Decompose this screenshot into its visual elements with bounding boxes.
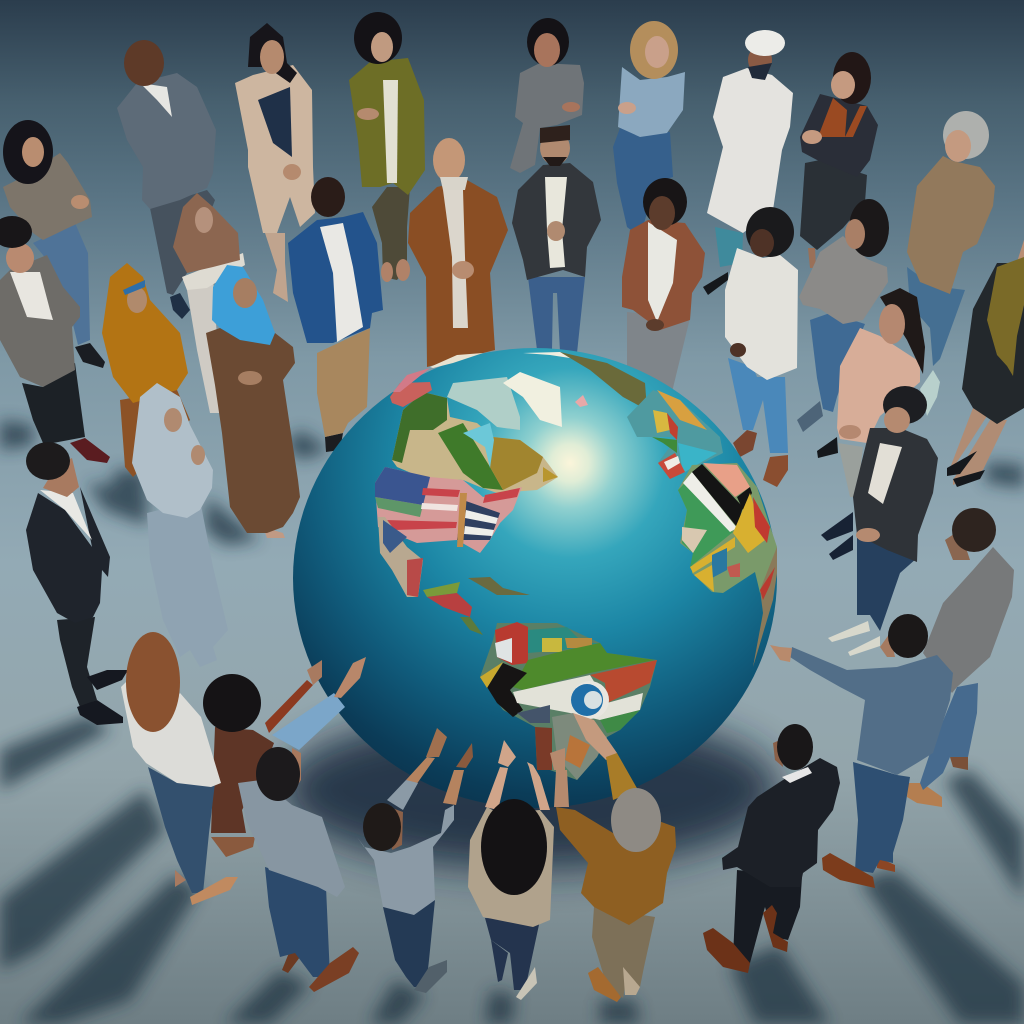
person: man in black suit at left (26, 442, 128, 725)
person: bald man in brown robe (408, 138, 508, 367)
person: woman in beige hijab (173, 193, 245, 413)
person: woman in rust top reaching (203, 657, 366, 857)
person: woman in white blouse (121, 632, 238, 905)
person: woman in beige cardigan (235, 23, 315, 302)
person: woman in white sweater (725, 207, 798, 487)
globe contact shadow (280, 710, 780, 870)
blue ring emblem on south america (571, 681, 609, 719)
person: woman in light grey hijab (132, 383, 228, 667)
continent: north america and arctic (390, 352, 588, 493)
person: older man in mustard shirt reaching (550, 713, 676, 1002)
person: older woman in tan sweater (907, 111, 995, 416)
person: blonde woman in striped top (613, 21, 685, 237)
globe sphere (293, 348, 777, 808)
continent: south america (480, 622, 657, 780)
person: man in grey sweater from behind (238, 747, 359, 992)
person: boy in grey-blue sweater reaching (357, 728, 473, 993)
person: woman in black blazer at right (821, 386, 938, 656)
person: woman in olive jacket (349, 12, 425, 282)
person: man in white robe and turban (703, 30, 793, 295)
flag: united states map (375, 467, 522, 553)
person: man in black blazer (512, 125, 601, 353)
person: woman in grey sweater back row (510, 18, 584, 173)
person: woman in black dress (800, 52, 878, 268)
globe (293, 348, 777, 808)
person: man in striped shirt pointing (770, 614, 953, 888)
person: man in blue jacket (288, 177, 383, 452)
person: woman in rust cardigan (622, 178, 705, 392)
person: man in grey suit (117, 40, 216, 319)
person: woman in grey knit top (797, 199, 889, 458)
person: woman with curly hair reaching (468, 740, 554, 1000)
cast shadows on floor (0, 420, 1024, 1024)
continent: africa with flags (678, 463, 777, 667)
islands of the caribbean (468, 577, 530, 595)
person: man in grey sweater at far right (907, 508, 1014, 807)
person: woman in mustard hijab (102, 263, 190, 477)
continent: europe and asia with flags (560, 352, 723, 479)
person: woman with olive scarf at right edge (947, 240, 1024, 487)
person: man in black suit from behind (703, 724, 840, 973)
person: woman in blue hijab and brown robe (206, 265, 300, 538)
person: man in grey blazer at left (0, 216, 110, 463)
person: woman in peach top (837, 288, 925, 497)
person: woman with jeans at far left (3, 120, 105, 368)
flag: mexico and central america (378, 517, 483, 635)
